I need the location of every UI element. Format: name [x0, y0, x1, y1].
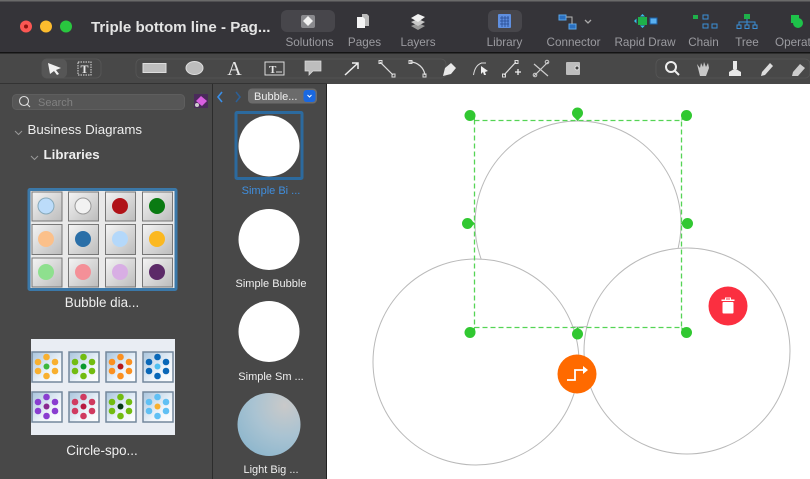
icon: text A: A	[227, 58, 242, 80]
icon: magnifier	[666, 62, 679, 75]
icon: pen	[443, 63, 456, 76]
library thumbnail: Circle-spoke	[31, 339, 175, 458]
panel divider	[212, 84, 213, 479]
toolbar button: Pages: Pages	[348, 36, 381, 49]
library thumbnail: Bubble diagrams	[29, 190, 176, 310]
icon: label	[265, 62, 284, 76]
toolbar button: Solutions: Solutions	[285, 36, 334, 49]
icon: bezier	[474, 63, 488, 75]
toolbar button: Layers	[400, 14, 436, 49]
icon: stamp	[729, 61, 741, 76]
title bar	[0, 0, 810, 54]
button: delete	[708, 286, 748, 326]
icon: hand	[697, 62, 709, 76]
toolbar button: Connector	[547, 15, 601, 49]
toolbar button: Operations: Operat	[775, 36, 810, 49]
icon: text box: T	[80, 62, 89, 76]
spoke row two	[35, 394, 169, 419]
shape: Simple Bubble	[236, 209, 306, 290]
icon: rectangle	[143, 64, 166, 72]
library dropdown: Bubble...	[254, 91, 297, 103]
canvas divider	[326, 84, 327, 479]
drawing tools bar	[0, 54, 810, 84]
icon: label: T	[269, 64, 277, 76]
shape: Simple Big	[236, 112, 302, 197]
toolbar button: Chain: Chain	[688, 36, 719, 49]
canvas	[327, 84, 810, 479]
icon: purple tag	[194, 94, 208, 108]
toolbar button: Operations	[775, 15, 810, 49]
window controls	[20, 20, 72, 32]
button: connector	[558, 354, 596, 394]
shape: Simple Small	[238, 301, 304, 383]
icon: eyedropper	[761, 63, 773, 76]
nav forward	[236, 92, 240, 102]
shape: Simple Small: Simple Sm ...	[238, 371, 304, 383]
icon: callout	[305, 61, 321, 75]
icon: arrow	[345, 63, 358, 75]
library dropdown	[248, 88, 317, 104]
icon: arc	[409, 60, 426, 77]
shape: Simple Big: Simple Bi ...	[242, 185, 300, 197]
icon: clip	[566, 62, 580, 75]
toolbar button: Rapid Draw	[614, 14, 676, 49]
icon: text box	[78, 62, 91, 76]
toolbar button: Pages	[348, 14, 381, 49]
thumbnail label: Circle-spo...	[66, 443, 138, 458]
tree item: Business Diagrams: Business Diagrams	[28, 122, 142, 137]
selection frame	[474, 120, 682, 328]
toolbar button: Connector: Connector	[547, 36, 601, 49]
bubble: left	[373, 259, 579, 465]
shape: Light Big	[238, 393, 300, 476]
search field	[12, 94, 184, 110]
icon: ellipse	[186, 62, 203, 74]
icon: brush	[792, 64, 805, 76]
icon: scissors	[533, 60, 549, 77]
toolbar button: Rapid Draw: Rapid Draw	[614, 36, 676, 49]
toolbar button: Tree: Tree	[735, 36, 759, 49]
spoke row one	[35, 354, 169, 379]
icon: add point	[502, 60, 521, 77]
document title: Triple bottom line - Pag...	[91, 19, 270, 36]
toolbar button: Solutions	[281, 10, 335, 49]
tree item: Libraries: Libraries	[44, 147, 100, 162]
toolbar button: Chain	[688, 15, 719, 49]
toolbar button: Library	[487, 10, 523, 49]
bubble: top	[475, 121, 681, 327]
library panel	[0, 84, 212, 479]
shape: Light Big: Light Big ...	[243, 464, 299, 476]
icon: pointer	[48, 63, 61, 75]
nav back	[218, 92, 222, 102]
bubble: right	[584, 248, 790, 454]
search field: Search	[38, 97, 73, 109]
selection handles	[462, 108, 693, 340]
toolbar button: Tree	[735, 14, 759, 49]
shapes panel	[213, 84, 326, 479]
toolbar button: Layers: Layers	[400, 36, 436, 49]
thumbnail label: Bubble dia...	[65, 295, 139, 310]
shape: Simple Bubble: Simple Bubble	[236, 278, 306, 290]
toolbar button: Library: Library	[487, 36, 523, 49]
icon: line	[379, 60, 395, 77]
